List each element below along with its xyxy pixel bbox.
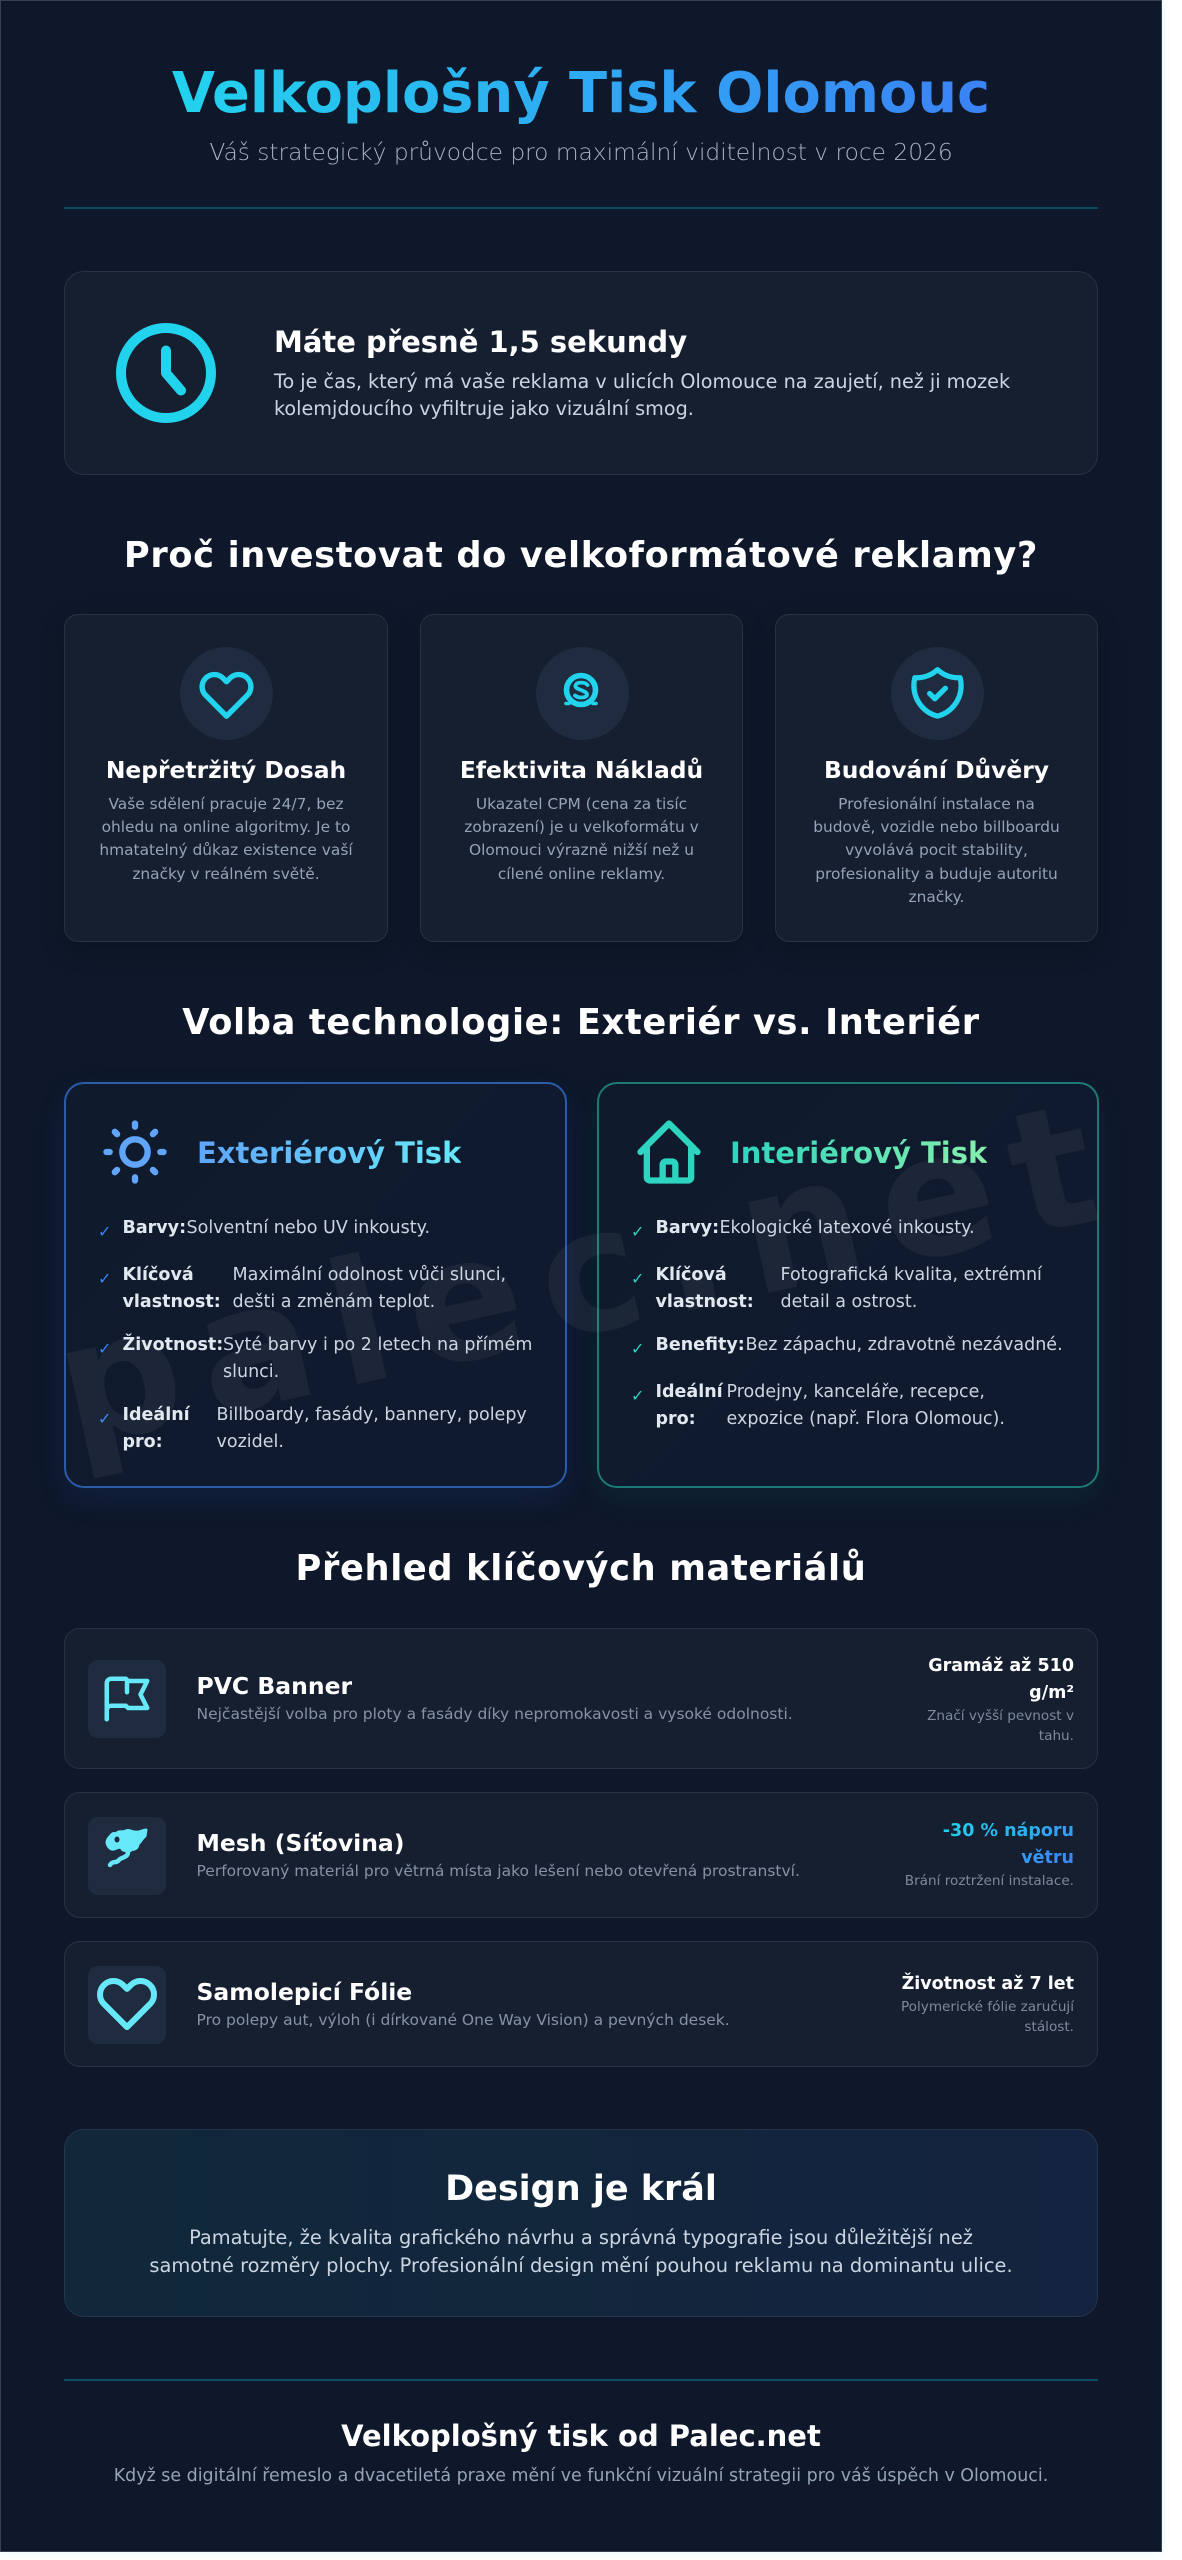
panel: feature reach: [64, 614, 388, 942]
checklist: interior: ✓: [631, 1339, 644, 1358]
feature text: Olomouci výrazně nižší než u: [469, 841, 694, 859]
material stat: Brání roztržení instalace.: [905, 1873, 1074, 1889]
icon: shield check: [891, 647, 984, 740]
feature text: profesionality a buduje autoritu: [815, 865, 1058, 883]
callout heading: Máte přesně 1,5 sekundy: [274, 325, 687, 359]
panel: self-adhesive foil: [64, 1941, 1098, 2067]
icon: house: [637, 1120, 701, 1184]
checklist: exterior: Barvy:: [122, 1218, 186, 1238]
icon: flag: [88, 1660, 166, 1738]
feature text: vyvolává pocit stability,: [845, 841, 1028, 859]
checklist: exterior: dešti a změnám teplot.: [232, 1292, 435, 1312]
material stat: Polymerické fólie zaručují: [901, 1999, 1074, 2015]
checklist: interior: ✓: [631, 1222, 644, 1241]
design heading: Design je král: [445, 2169, 717, 2209]
checklist: interior: expozice (např. Flora Olomouc).: [726, 1409, 1005, 1429]
feature text: [99, 795, 353, 883]
material stat: Gramáž až 510: [928, 1656, 1074, 1676]
icon: heart: [88, 1966, 166, 2044]
material description: Pro polepy aut, výloh (i dírkované One Way Vision) a pevných desek.: [196, 2011, 730, 2029]
feature text: Vaše sdělení pracuje 24/7, bez: [108, 795, 344, 813]
material name: PVC Banner: [196, 1672, 352, 1700]
material stat: [901, 1972, 1074, 2034]
callout text: To je čas, který má vaše reklama v ulicích Olomouce na zaujetí, než ji mozek: [274, 370, 1010, 392]
checklist: exterior: pro:: [122, 1432, 163, 1452]
design text: [149, 2226, 1013, 2277]
checklist: interior: Barvy:: [656, 1218, 719, 1238]
icon: mesh blob: [88, 1817, 166, 1895]
material stat: [905, 1821, 1074, 1889]
material description: Nejčastější volba pro ploty a fasády díky nepromokavosti a vysoké odolnosti.: [196, 1705, 793, 1723]
checklist: exterior: Životnost:: [122, 1335, 223, 1355]
checklist: exterior: [98, 1218, 532, 1452]
panel: 1.5 second callout: [64, 271, 1098, 475]
checklist: interior: [631, 1218, 1063, 1429]
icon: heart: [180, 647, 273, 740]
panel: mesh: [64, 1792, 1098, 1918]
material stat: g/m²: [1029, 1683, 1074, 1703]
checklist: interior: Ideální: [656, 1382, 723, 1402]
checklist: interior: pro:: [656, 1409, 696, 1429]
footer text: Když se digitální řemeslo a dvacetiletá praxe mění ve funkční vizuální strategii pro váš úspěch v Olomouci.: [114, 2466, 1048, 2486]
checklist: exterior: vlastnost:: [122, 1292, 221, 1312]
checklist: interior: Prodejny, kanceláře, recepce,: [726, 1382, 985, 1402]
material stat: [927, 1656, 1074, 1744]
icon: coin S: [536, 647, 629, 740]
material name: Samolepicí Fólie: [196, 1978, 412, 2006]
icon: sun: [103, 1120, 167, 1184]
checklist: interior: ✓: [631, 1269, 644, 1288]
checklist: interior: Klíčová: [656, 1265, 727, 1285]
checklist: interior: Fotografická kvalita, extrémní: [780, 1265, 1042, 1285]
footer heading: Velkoplošný tisk od Palec.net: [341, 2419, 821, 2453]
material stat: Životnost až 7 let: [902, 1974, 1074, 1994]
exterior heading: Exteriérový Tisk: [197, 1136, 461, 1170]
checklist: exterior: Klíčová: [122, 1265, 194, 1285]
panel: design is king: [64, 2129, 1098, 2317]
watermark: palec.net: [39, 1061, 1133, 1487]
feature text: [813, 795, 1060, 906]
design text: samotné rozměry plochy. Profesionální design mění pouhou reklamu na dominantu ulice.: [149, 2254, 1013, 2277]
material stat: větru: [1021, 1848, 1074, 1868]
feature title: Efektivita Nákladů: [460, 756, 703, 784]
feature text: značky.: [909, 888, 964, 906]
panel: PVC banner: [64, 1628, 1098, 1769]
heading: materials: Přehled klíčových materiálů: [296, 1548, 866, 1589]
interior heading: Interiérový Tisk: [730, 1136, 987, 1170]
material description: Perforovaný materiál pro větrná místa jako lešení nebo otevřená prostranství.: [196, 1862, 800, 1880]
checklist: exterior: Ideální: [122, 1405, 190, 1425]
checklist: exterior: ✓: [98, 1269, 111, 1288]
checklist: interior: detail a ostrost.: [780, 1292, 917, 1312]
checklist: interior: vlastnost:: [656, 1292, 754, 1312]
icon: clock: [116, 323, 216, 423]
checklist: exterior: ✓: [98, 1339, 111, 1358]
checklist: exterior: ✓: [98, 1222, 111, 1241]
material stat: Značí vyšší pevnost v: [927, 1708, 1074, 1724]
checklist: interior: Bez zápachu, zdravotně nezávadné.: [746, 1335, 1063, 1355]
checklist: interior: Ekologické latexové inkousty.: [720, 1218, 975, 1238]
feature text: [464, 795, 699, 883]
checklist: exterior: ✓: [98, 1409, 111, 1428]
material stat: -30 % náporu: [943, 1821, 1074, 1841]
material stat: stálost.: [1024, 2018, 1074, 2034]
feature title: Budování Důvěry: [824, 756, 1049, 784]
checklist: interior: Benefity:: [656, 1335, 745, 1355]
feature text: zobrazení) je u velkoformátu v: [464, 818, 699, 836]
checklist: exterior: vozidel.: [216, 1432, 284, 1452]
callout text: [274, 370, 1010, 420]
material name: Mesh (Síťovina): [196, 1829, 405, 1857]
feature text: hmatatelný důkaz existence vaší: [99, 841, 353, 859]
callout text: kolemjdoucího vyfiltruje jako vizuální smog.: [274, 397, 694, 420]
title: Velkoplošný Tisk Olomouc: [172, 61, 990, 126]
checklist: exterior: Solventní nebo UV inkousty.: [186, 1218, 430, 1238]
panel: feature cost: [420, 614, 743, 942]
feature text: budově, vozidle nebo billboardu: [813, 818, 1060, 836]
checklist: exterior: Maximální odolnost vůči slunci,: [232, 1265, 506, 1285]
design text: Pamatujte, že kvalita grafického návrhu a správná typografie jsou důležitější než: [189, 2226, 973, 2249]
feature text: Ukazatel CPM (cena za tisíc: [476, 795, 687, 813]
checklist: exterior: Syté barvy i po 2 letech na přímém: [223, 1335, 532, 1355]
checklist: interior: ✓: [631, 1386, 644, 1405]
checklist: exterior: Billboardy, fasády, bannery, polepy: [216, 1405, 527, 1425]
feature text: Profesionální instalace na: [838, 795, 1035, 813]
subtitle: Váš strategický průvodce pro maximální viditelnost v roce 2026: [209, 139, 953, 166]
panel: interior print: [597, 1082, 1099, 1488]
panel: feature trust: [775, 614, 1098, 942]
heading: why invest: Proč investovat do velkoformátové reklamy?: [124, 535, 1038, 576]
feature text: ohledu na online algoritmy. Je to: [102, 818, 350, 836]
feature text: značky v reálném světě.: [132, 865, 320, 883]
feature text: cílené online reklamy.: [498, 865, 665, 883]
heading: technology: Volba technologie: Exteriér vs. Interiér: [182, 1002, 980, 1043]
feature title: Nepřetržitý Dosah: [106, 756, 346, 784]
checklist: exterior: slunci.: [223, 1362, 279, 1382]
panel: exterior print: [64, 1082, 567, 1488]
material stat: tahu.: [1039, 1728, 1074, 1744]
